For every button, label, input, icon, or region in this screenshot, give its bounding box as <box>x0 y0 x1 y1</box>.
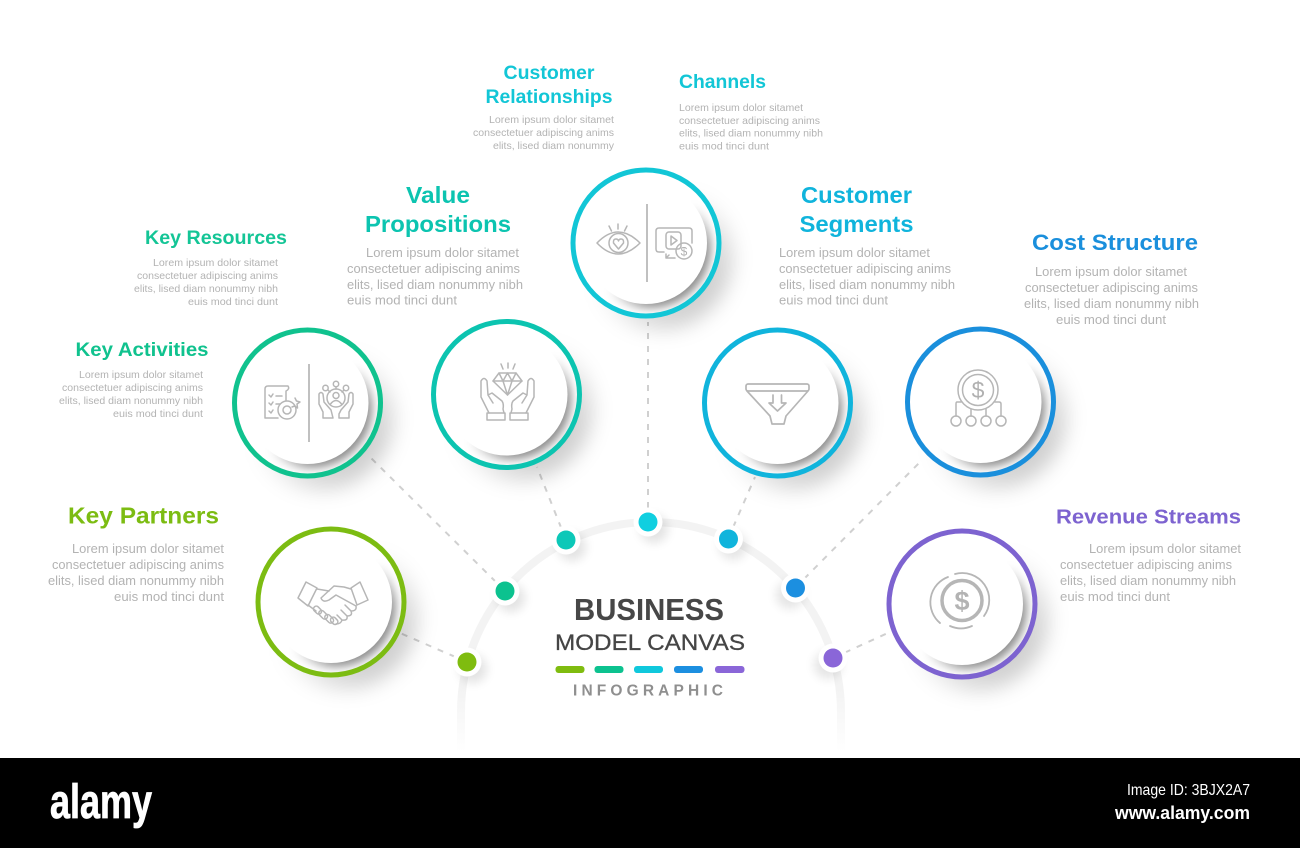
text: key activities: euis mod tinci dunt <box>113 408 203 420</box>
text: key resources: elits, lised diam nonummy nibh <box>134 283 278 295</box>
divider <box>646 204 648 282</box>
text: customer segments: euis mod tinci dunt <box>779 294 889 308</box>
text: key activities <box>59 339 209 420</box>
text: value propositions: Propositions <box>365 211 511 237</box>
icon: hands with person network <box>319 381 353 418</box>
text: customer segments: consectetuer adipiscing anims <box>779 262 951 276</box>
text: channels <box>679 71 823 152</box>
divider <box>308 364 310 442</box>
text: cost structure: Cost Structure <box>1032 230 1198 255</box>
icon: dollar coin with arcs <box>930 573 989 628</box>
text: revenue streams: euis mod tinci dunt <box>1060 590 1171 604</box>
circle: cost structure <box>908 329 1066 488</box>
text: revenue streams: elits, lised diam nonummy nibh <box>1060 574 1236 588</box>
text: key partners: Lorem ipsum dolor sitamet <box>72 542 225 556</box>
central arc <box>461 522 841 752</box>
circle: customer segments <box>704 330 863 489</box>
footer band: www.alamy.com <box>1114 803 1250 823</box>
text: customer segments: elits, lised diam nonummy nibh <box>779 278 955 292</box>
central title <box>555 592 745 700</box>
coin dollar: $ <box>681 244 688 258</box>
icon: handshake <box>298 582 368 626</box>
text: key activities: Lorem ipsum dolor sitamet <box>79 369 203 381</box>
central title: INFOGRAPHIC <box>573 682 723 700</box>
text: value propositions <box>347 182 523 308</box>
text: key activities: Key Activities <box>76 339 209 361</box>
text: channels: Lorem ipsum dolor sitamet <box>679 102 803 114</box>
dot: customer relationships <box>634 508 668 543</box>
text: key partners: consectetuer adipiscing anims <box>52 558 224 572</box>
circle: customer relationships and channels <box>573 170 732 329</box>
text: key partners: euis mod tinci dunt <box>114 590 225 604</box>
circle: revenue streams <box>889 531 1048 690</box>
text: key resources: euis mod tinci dunt <box>188 296 278 308</box>
text: customer relationships: Lorem ipsum dolor sitamet <box>489 114 614 126</box>
text: customer segments <box>779 182 955 308</box>
text: channels: euis mod tinci dunt <box>679 140 769 152</box>
text: customer segments: Customer <box>801 182 912 208</box>
text: value propositions: elits, lised diam nonummy nibh <box>347 278 523 292</box>
text: channels: elits, lised diam nonummy nibh <box>679 128 823 140</box>
icon: funnel <box>746 384 809 424</box>
circle: key partners <box>258 529 417 688</box>
text: value propositions: consectetuer adipiscing anims <box>347 262 520 276</box>
cost dollar sign: $ <box>972 377 985 403</box>
text: key activities: consectetuer adipiscing anims <box>62 382 203 394</box>
revenue dollar sign: $ <box>954 586 970 616</box>
dashed connectors <box>368 322 922 662</box>
dot: key partners <box>452 648 487 683</box>
text: key resources: Key Resources <box>145 227 287 249</box>
icon: eye with heart <box>597 224 640 254</box>
text: customer segments: Segments <box>800 211 914 237</box>
text: key resources: Lorem ipsum dolor sitamet <box>153 257 278 269</box>
text: customer segments: Lorem ipsum dolor sitamet <box>779 246 931 260</box>
text: revenue streams: Lorem ipsum dolor sitamet <box>1089 542 1242 556</box>
text: key activities: elits, lised diam nonummy nibh <box>59 395 203 407</box>
text: value propositions: Lorem ipsum dolor sitamet <box>366 246 520 260</box>
text: cost structure <box>1024 230 1199 327</box>
text: customer relationships: Relationships <box>486 86 613 108</box>
text: cost structure: Lorem ipsum dolor sitamet <box>1035 265 1188 279</box>
text: value propositions: euis mod tinci dunt <box>347 294 458 308</box>
text: cost structure: consectetuer adipiscing anims <box>1025 281 1198 295</box>
text: revenue streams <box>1056 506 1242 604</box>
colour bars <box>556 666 744 673</box>
icon: diamond in hands <box>481 363 534 420</box>
footer band: alamy <box>50 776 152 829</box>
text: key partners: elits, lised diam nonummy nibh <box>48 574 224 588</box>
text: cost structure: euis mod tinci dunt <box>1056 313 1167 327</box>
dot: cost structure <box>776 574 810 609</box>
circle: key activities <box>234 330 393 489</box>
dot: revenue streams <box>814 644 848 679</box>
text: key partners: Key Partners <box>68 502 219 528</box>
text: customer relationships: elits, lised diam nonummy <box>493 140 615 152</box>
dot: key activities <box>490 576 525 612</box>
text: customer relationships <box>473 62 615 152</box>
footer band: Image ID: 3BJX2A7 <box>1127 782 1250 799</box>
footer band <box>0 758 1300 848</box>
dot: value propositions <box>552 526 586 561</box>
text: cost structure: elits, lised diam nonummy nibh <box>1024 297 1199 311</box>
central title: BUSINESS <box>574 592 724 627</box>
icon: dollar network <box>951 370 1006 426</box>
icon: checklist with target <box>265 386 300 419</box>
text: key resources: consectetuer adipiscing anims <box>137 270 278 282</box>
text: revenue streams: consectetuer adipiscing anims <box>1060 558 1232 572</box>
circle: value propositions <box>434 322 592 480</box>
text: customer relationships: consectetuer adipiscing anims <box>473 127 614 139</box>
text: key partners <box>48 502 225 604</box>
text: channels: consectetuer adipiscing anims <box>679 115 820 127</box>
text: channels: Channels <box>679 71 766 93</box>
timeline dots <box>452 508 848 683</box>
text: revenue streams: Revenue Streams <box>1056 506 1241 528</box>
text: key resources <box>134 227 287 308</box>
dot: customer segments <box>714 524 747 560</box>
text: customer relationships: Customer <box>504 62 595 84</box>
central title: MODEL CANVAS <box>555 630 745 655</box>
icon: video with dollar coin <box>656 228 692 259</box>
text: value propositions: Value <box>406 182 470 208</box>
